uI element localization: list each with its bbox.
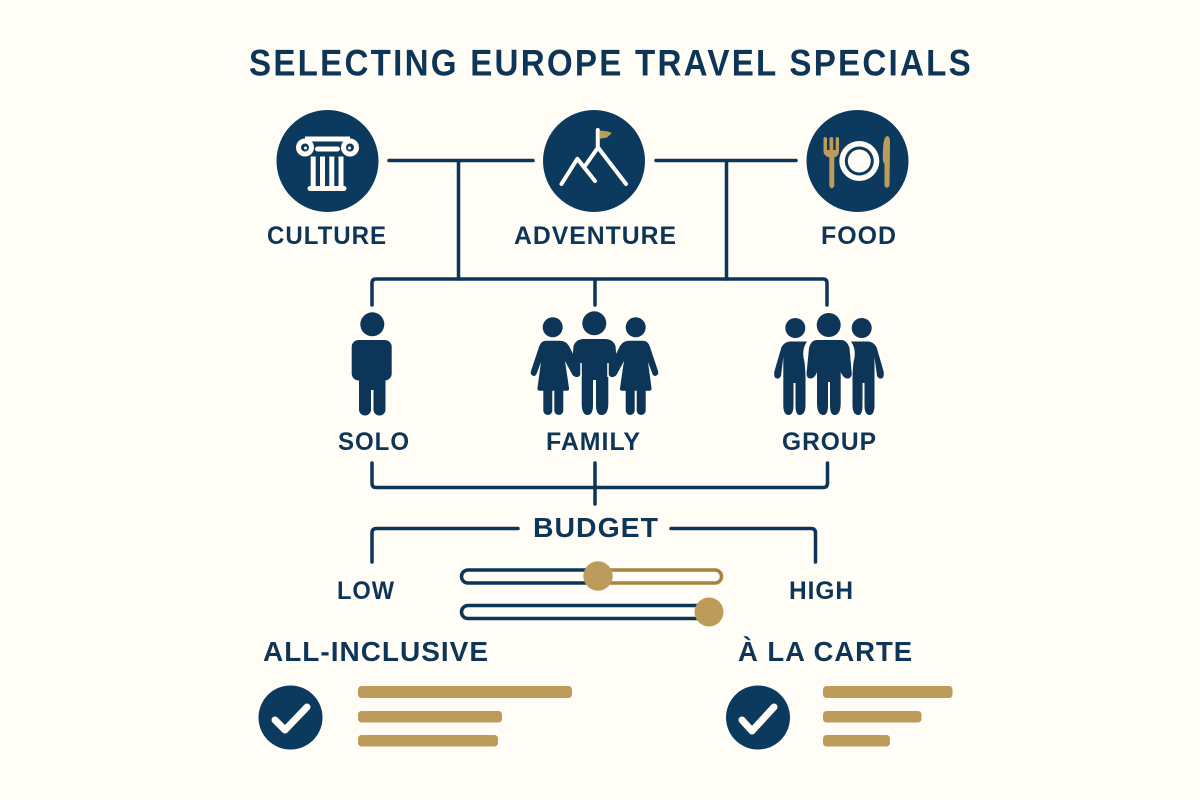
- icon: solo traveller: [352, 312, 392, 416]
- list bars: all-inclusive: [358, 686, 572, 746]
- icon: family: [531, 311, 658, 415]
- label: culture: CULTURE: [267, 222, 387, 250]
- heading: all-inclusive: ALL-INCLUSIVE: [263, 636, 489, 667]
- list bars: a la carte: [823, 686, 952, 746]
- label: solo: SOLO: [338, 428, 410, 456]
- label: family: FAMILY: [546, 428, 641, 456]
- slider: budget lower: [462, 598, 724, 626]
- label: high: HIGH: [789, 577, 854, 605]
- label: adventure: ADVENTURE: [514, 222, 677, 250]
- connector: travellers to budget: [372, 463, 828, 504]
- label: low: LOW: [337, 577, 395, 605]
- icon: food plate and cutlery: [806, 110, 908, 212]
- slider: budget upper: [462, 561, 722, 591]
- heading: a la carte: À LA CARTE: [738, 636, 913, 667]
- icon: a la carte check: [726, 686, 790, 750]
- label: food: FOOD: [821, 222, 897, 250]
- icon: group: [774, 313, 884, 415]
- icon: all-inclusive check: [258, 686, 322, 750]
- budget bracket: [372, 528, 816, 562]
- label: group: GROUP: [782, 428, 877, 456]
- heading: budget: BUDGET: [533, 512, 659, 543]
- title: SELECTING EUROPE TRAVEL SPECIALS: [249, 42, 973, 84]
- connector: interests to travellers: [372, 160, 827, 305]
- icon: culture column: [276, 110, 378, 212]
- icon: adventure mountain: [543, 110, 645, 212]
